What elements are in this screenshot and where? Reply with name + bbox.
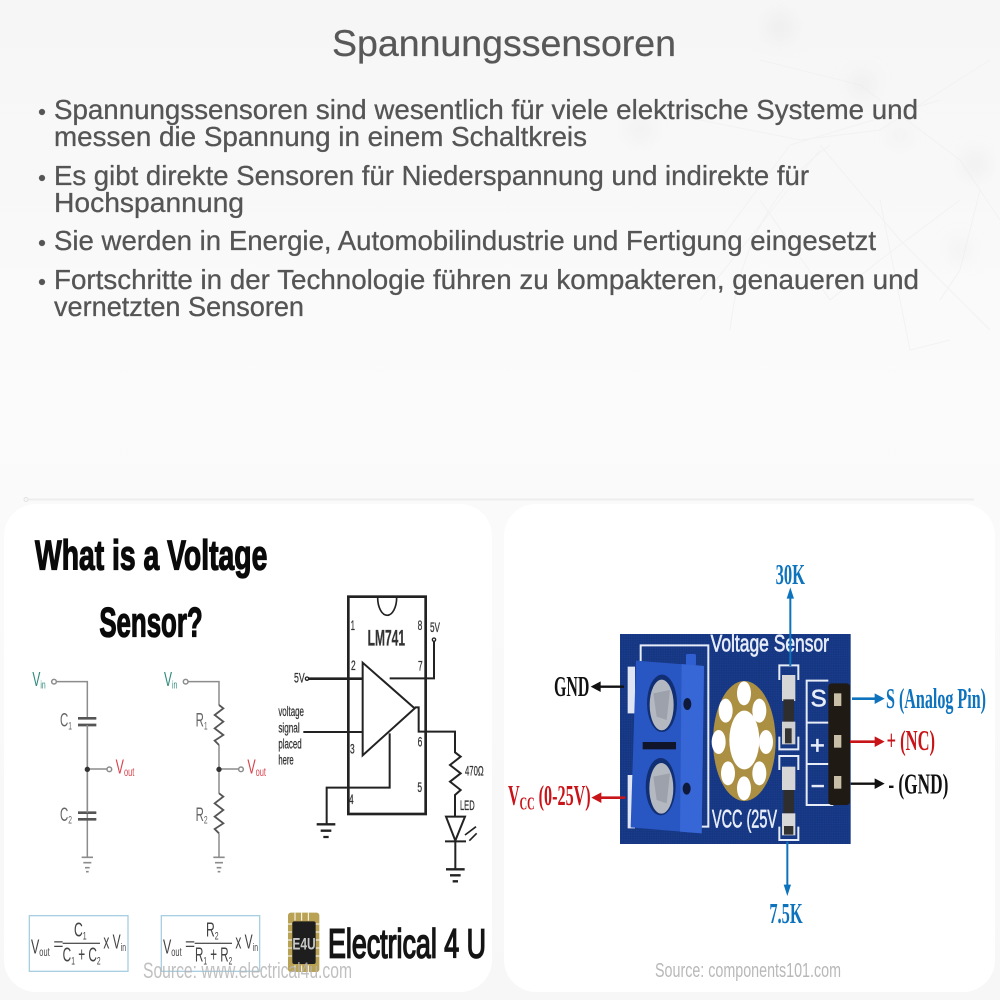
- pin header: [828, 683, 850, 805]
- resistive divider circuit: [164, 669, 266, 872]
- formula: capacitive divider: V: [31, 936, 44, 958]
- module labels: GND: [554, 672, 589, 703]
- formula: capacitive divider: x V: [103, 931, 132, 953]
- icon: E4U chip logo: E4U: [292, 934, 316, 953]
- formula: resistive divider: in: [253, 942, 258, 954]
- LM741 op-amp circuit: 4: [349, 791, 354, 807]
- formula: resistive divider: R: [206, 920, 220, 942]
- LM741 op-amp circuit: voltage: [278, 703, 304, 719]
- formula: capacitive divider: 1: [71, 955, 75, 967]
- LM741 op-amp circuit: 6: [418, 734, 422, 750]
- resistive divider circuit: R: [196, 711, 210, 732]
- bullet 2: Es gibt direkte Sensoren für Niederspannung und indirekte für: [54, 160, 809, 191]
- silkscreen labels: S: [811, 686, 827, 713]
- divider: [24, 498, 974, 502]
- LM741 op-amp circuit: placed: [278, 736, 302, 752]
- module labels: [508, 560, 986, 930]
- resistive divider circuit: V: [164, 669, 177, 691]
- icon: E4U chip logo: [288, 913, 319, 972]
- module labels: V: [508, 781, 528, 812]
- heading: what is a voltage sensor: [35, 531, 267, 646]
- formula: resistive divider: 2: [215, 930, 219, 942]
- formula: capacitive divider: 1: [83, 930, 87, 942]
- arrow: GND left: [591, 681, 624, 692]
- bullet list: [39, 94, 919, 322]
- circuit board: [620, 631, 851, 844]
- formula: resistive divider: V: [163, 936, 176, 958]
- silkscreen labels: [641, 631, 833, 840]
- capacitive divider circuit: 1: [68, 720, 72, 732]
- arrow: 30K: [787, 587, 794, 666]
- formula: resistive divider: [161, 916, 260, 971]
- formula: resistive divider: + R: [207, 945, 229, 967]
- LM741 op-amp circuit: 5V: [430, 619, 440, 635]
- formula: capacitive divider: in: [121, 942, 126, 954]
- LM741 op-amp circuit: 1: [351, 617, 355, 633]
- panel: voltage sensor module: [504, 504, 995, 992]
- formula: capacitive divider: [29, 916, 128, 971]
- formula: resistive divider: 2: [229, 955, 232, 967]
- module labels: 30K: [776, 560, 805, 591]
- resistors: [782, 675, 795, 835]
- arrow: NC: [850, 736, 885, 747]
- bullet 2: [39, 160, 809, 218]
- capacitive divider circuit: in: [40, 680, 46, 692]
- formula: resistive divider: x V: [235, 931, 264, 953]
- panel: voltage sensor diagram: [4, 504, 492, 992]
- silkscreen labels: Voltage Sensor: [711, 631, 829, 658]
- LM741 op-amp circuit: here: [278, 752, 294, 768]
- arrow: GND right: [851, 778, 885, 789]
- resistive divider circuit: 1: [204, 720, 208, 732]
- source credit: components101: Source: components101.com: [655, 960, 841, 982]
- capacitive divider circuit: 2: [68, 815, 72, 827]
- module labels: + (NC): [887, 726, 935, 757]
- formula: resistive divider: R: [195, 945, 209, 967]
- LM741 op-amp circuit: [278, 597, 484, 881]
- capacitive divider circuit: [32, 669, 135, 872]
- heading: what is a voltage sensor: What is a Voltage: [35, 531, 267, 578]
- capacitive divider circuit: C: [60, 805, 74, 826]
- silkscreen labels: −: [811, 773, 825, 800]
- bullet 3: Sie werden in Energie, Automobilindustrie und Fertigung eingesetzt: [54, 225, 876, 256]
- resistive divider circuit: V: [247, 756, 261, 778]
- capacitive divider circuit: out: [124, 765, 135, 779]
- LM741 op-amp circuit: 5: [417, 779, 422, 795]
- module labels: CC: [520, 794, 535, 814]
- module labels: 7.5K: [769, 899, 803, 930]
- bullet 4: [39, 264, 919, 322]
- title: Spannungssensoren: [332, 23, 676, 64]
- bullet 4: vernetzten Sensoren: [54, 291, 304, 322]
- formula: capacitive divider: + C: [75, 945, 97, 967]
- LM741 op-amp circuit: 5V: [294, 670, 305, 686]
- formula: capacitive divider: out: [39, 945, 50, 959]
- bullet 2: Hochspannung: [54, 187, 244, 218]
- LM741 op-amp circuit: 2: [351, 657, 356, 673]
- silkscreen labels: VCC (25V: [712, 805, 777, 833]
- bullet 1: messen die Spannung in einem Schaltkreis: [54, 121, 587, 152]
- resistive divider circuit: R: [196, 805, 210, 826]
- LM741 op-amp circuit: LM741: [368, 626, 405, 651]
- heading: what is a voltage sensor: Sensor?: [99, 599, 203, 646]
- bullet 1: Spannungssensoren sind wesentlich für viele elektrische Systeme und: [54, 94, 918, 125]
- formula: capacitive divider: C: [63, 945, 77, 967]
- source credit: electrical4u: Source: www.electrical4u.com: [143, 958, 352, 983]
- LM741 op-amp circuit: 8: [418, 617, 422, 633]
- LM741 op-amp circuit: signal: [278, 720, 300, 736]
- module labels: - (GND): [888, 769, 948, 800]
- arrow: 7.5K: [784, 842, 791, 896]
- resistive divider circuit: out: [256, 765, 266, 779]
- capacitive divider circuit: V: [116, 756, 129, 778]
- silkscreen labels: +: [810, 731, 825, 759]
- capacitive divider circuit: C: [60, 711, 74, 732]
- formula: capacitive divider: C: [74, 920, 88, 942]
- resistive divider circuit: in: [172, 680, 177, 692]
- LM741 op-amp circuit: 470Ω: [465, 762, 484, 778]
- formula: resistive divider: 1: [203, 955, 207, 967]
- resistive divider circuit: 2: [204, 815, 208, 827]
- arrow: VCC: [591, 792, 625, 803]
- module labels: (0-25V): [535, 781, 591, 812]
- mounting hole: [712, 681, 776, 801]
- formula: resistive divider: out: [171, 945, 182, 959]
- formula: capacitive divider: 2: [97, 955, 101, 967]
- LM741 op-amp circuit: 3: [350, 740, 355, 756]
- screw terminal: [628, 654, 704, 833]
- LM741 op-amp circuit: LED: [460, 797, 475, 813]
- bullet 1: [39, 94, 918, 152]
- capacitive divider circuit: V: [32, 669, 46, 691]
- LM741 op-amp circuit: 7: [418, 658, 423, 674]
- formula: capacitive divider: =: [53, 934, 63, 954]
- arrow: S analog pin: [852, 693, 885, 704]
- formula: resistive divider: =: [185, 934, 195, 954]
- bullet 4: Fortschritte in der Technologie führen zu kompakteren, genaueren und: [54, 264, 919, 295]
- logo text: Electrical 4 U: Electrical 4 U: [328, 921, 486, 967]
